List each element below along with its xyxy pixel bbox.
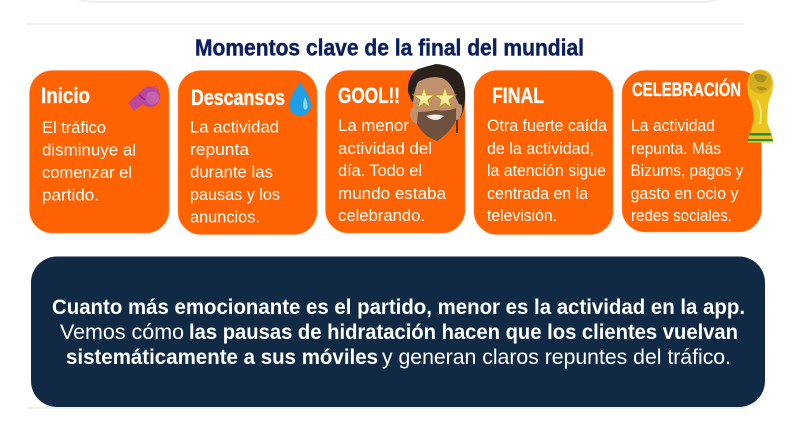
panel: GOOL: [326, 64, 465, 233]
body text: de la actividad,: [487, 139, 594, 158]
body text: [42, 118, 136, 204]
body text: la atención sigue: [487, 161, 606, 180]
body text: partido.: [42, 186, 99, 204]
heading: Celebración: CELEBRACIÓN: [632, 79, 741, 101]
body text: repunta: [190, 140, 250, 159]
panel: Descansos: [178, 70, 317, 234]
callout text: Vemos cómo: [60, 321, 184, 344]
callout panel: [31, 256, 765, 407]
panel: Celebración: [622, 70, 773, 232]
icon: player face with star eyes: [408, 64, 465, 141]
body text: durante las: [190, 162, 273, 182]
body text: Bizums, pagos y: [630, 161, 744, 180]
heading: Descansos: Descansos: [191, 85, 285, 110]
body text: repunta. Más: [631, 139, 721, 158]
title: Momentos clave de la final del mundial: [195, 34, 584, 60]
icon: whistle: [128, 86, 160, 111]
body text: mundo estaba: [338, 184, 447, 203]
body text: [487, 116, 608, 225]
icon: World Cup trophy: [747, 70, 773, 142]
callout text: [52, 296, 745, 369]
heading: FINAL: FINAL: [492, 83, 544, 108]
heading: Inicio: Inicio: [41, 83, 90, 108]
callout text: y generan claros repuntes del tráfico.: [382, 346, 731, 369]
body text: pausas y los: [190, 185, 280, 204]
body text: disminuye al: [42, 140, 136, 160]
icon: water drop: [289, 82, 311, 116]
body text: gasto en ocio y: [630, 184, 739, 203]
heading: GOOL: GOOL!!: [338, 83, 400, 108]
body text: [190, 118, 280, 226]
panel: FINAL: [474, 70, 613, 234]
body text: centrada en la: [487, 184, 589, 203]
body text: La actividad: [631, 116, 715, 135]
panel: Inicio: [30, 70, 169, 233]
body text: televisión.: [487, 206, 557, 225]
body text: El tráfico: [42, 118, 106, 137]
callout text: sistemáticamente a sus móviles: [66, 346, 378, 369]
body text: celebrando.: [338, 206, 425, 225]
callout text: Cuanto más emocionante es el partido, menor es la actividad en la app.: [52, 296, 745, 319]
body text: actividad del: [338, 139, 432, 158]
body text: redes sociales.: [631, 206, 732, 225]
body text: Otra fuerte caída: [487, 116, 608, 135]
body text: anuncios.: [190, 208, 260, 226]
body text: día. Todo el: [338, 161, 422, 180]
body text: La actividad: [190, 118, 279, 136]
body text: La menor: [338, 116, 409, 135]
callout text: las pausas de hidratación hacen que los clientes vuelvan: [189, 321, 738, 344]
body text: [630, 116, 744, 225]
body text: comenzar el: [42, 163, 132, 182]
body text: [338, 116, 447, 225]
